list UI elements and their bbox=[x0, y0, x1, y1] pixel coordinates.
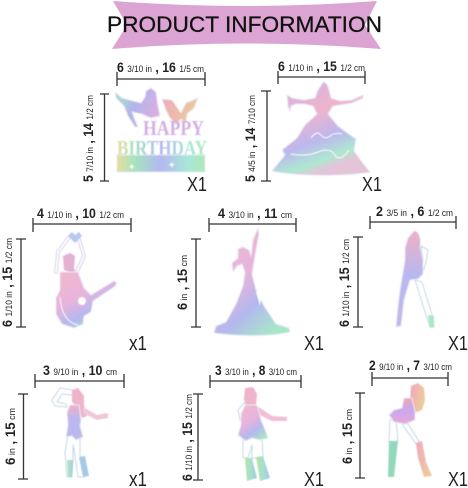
product 5: standing performer bbox=[337, 204, 468, 355]
width dimension: 6 3/10 in , 16 1/5 cm bbox=[117, 60, 204, 75]
width dimension bbox=[33, 206, 131, 232]
product 4: flared gown bbox=[175, 206, 324, 355]
product 1: birthday topper bbox=[81, 60, 207, 196]
figure artwork bbox=[52, 388, 108, 477]
figure artwork bbox=[238, 387, 287, 481]
width dimension: 3 9/10 in , 10 cm bbox=[43, 363, 117, 378]
width dimension bbox=[210, 363, 301, 388]
product 2: ball gown bbox=[243, 59, 382, 196]
quantity: X1 bbox=[304, 333, 324, 355]
width dimension: 4 3/10 in , 11 cm bbox=[218, 206, 292, 221]
height dimension bbox=[180, 394, 203, 481]
width dimension: 2 3/5 in , 6 1/2 cm bbox=[376, 204, 453, 219]
width dimension: 4 1/10 in , 10 1/2 cm bbox=[37, 206, 124, 221]
height dimension bbox=[175, 239, 201, 327]
height dimension: 5 4/5 in , 14 7/10 cm bbox=[243, 95, 258, 182]
quantity: X1 bbox=[187, 174, 207, 196]
height dimension: 6 in , 15 cm bbox=[3, 408, 18, 465]
width dimension: 3 3/10 in , 8 3/10 cm bbox=[215, 363, 297, 378]
topper artwork: BIRTHDAY bbox=[117, 136, 207, 160]
width dimension bbox=[209, 206, 296, 232]
quantity: x1 bbox=[129, 333, 147, 355]
topper artwork: ✦ bbox=[168, 161, 176, 171]
title: PRODUCT INFORMATION bbox=[107, 12, 382, 37]
topper artwork: HAPPY bbox=[143, 116, 204, 140]
product 3: guitar bbox=[0, 206, 147, 355]
figure artwork bbox=[388, 383, 432, 477]
height dimension: 6 1/10 in , 15 1/2 cm bbox=[180, 394, 195, 481]
figure artwork bbox=[396, 231, 434, 328]
width dimension bbox=[370, 204, 456, 229]
height dimension: 6 1/10 in , 15 1/2 cm bbox=[0, 238, 15, 327]
height dimension bbox=[0, 238, 26, 327]
height dimension: 5 7/10 in , 14 1/2 cm bbox=[81, 95, 96, 182]
topper artwork: ✦ bbox=[128, 163, 136, 173]
height dimension: 6 in , 15 cm bbox=[175, 255, 190, 310]
product 7: dancer in fringe dress bbox=[180, 363, 324, 488]
height dimension bbox=[337, 237, 363, 327]
width dimension bbox=[35, 363, 124, 388]
height dimension: 6 in , 15 cm bbox=[340, 409, 355, 464]
product 6: dancer bbox=[3, 363, 147, 488]
guitar artwork bbox=[56, 232, 117, 328]
height dimension bbox=[3, 394, 28, 479]
width dimension: 2 9/10 in , 7 3/10 cm bbox=[369, 358, 452, 373]
product 8: crouching figure in boots bbox=[340, 358, 468, 488]
gown artwork bbox=[272, 82, 370, 175]
gown artwork bbox=[214, 228, 290, 336]
title banner bbox=[107, 1, 382, 49]
quantity: X1 bbox=[362, 174, 382, 196]
width dimension: 6 1/10 in , 15 1/2 cm bbox=[278, 59, 365, 74]
height dimension: 6 1/10 in , 15 1/2 cm bbox=[337, 239, 352, 327]
topper artwork bbox=[115, 88, 207, 173]
